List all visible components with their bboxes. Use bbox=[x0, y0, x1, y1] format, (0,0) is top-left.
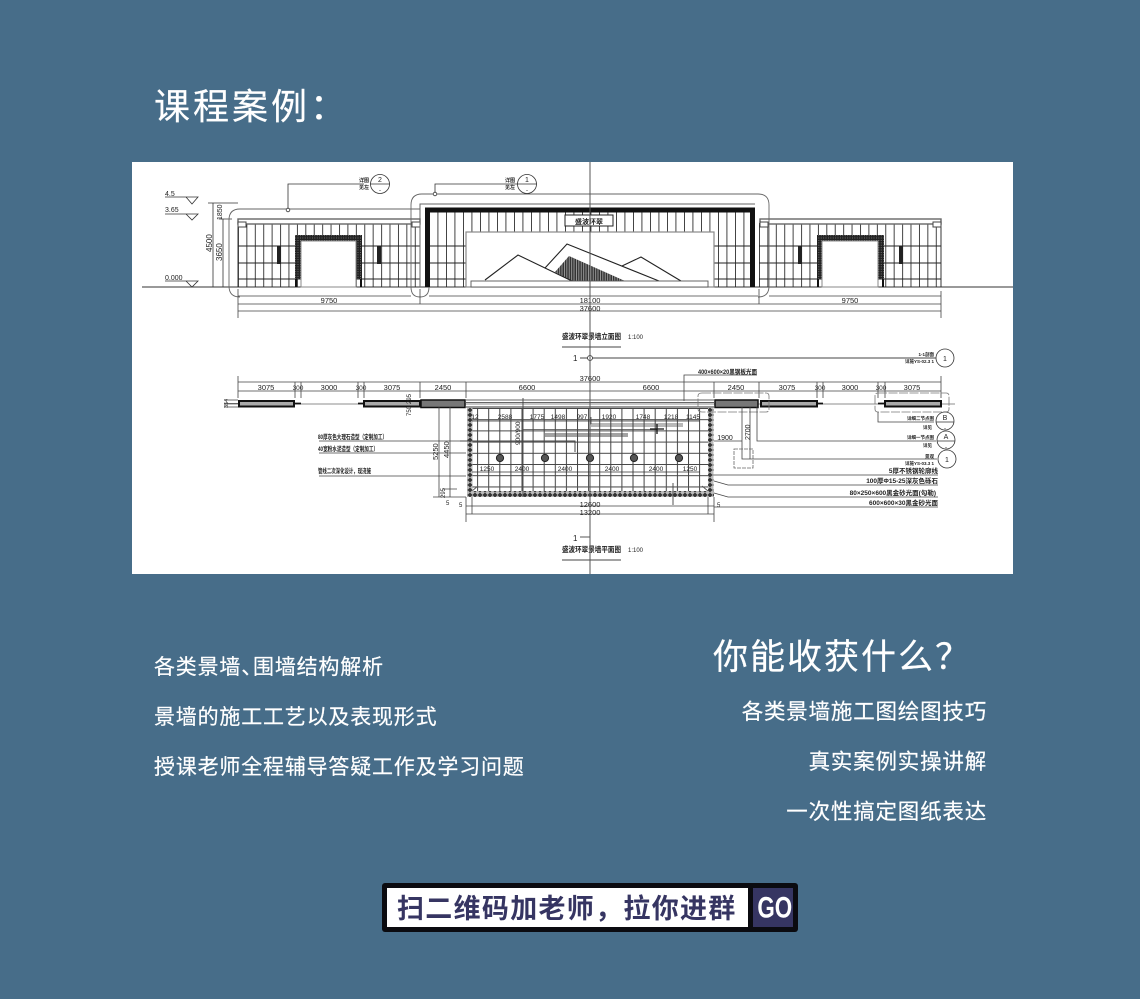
plan inner dimensions: 1498 bbox=[551, 414, 566, 421]
plan left notes: 管线二次深化设计，现浇施 bbox=[318, 466, 371, 475]
section line with marker: 1-1剖面 bbox=[918, 351, 934, 358]
plan inner dimensions: 1920 bbox=[602, 414, 617, 421]
text block: gains bbox=[742, 695, 987, 826]
plan inner dimensions: 2400 bbox=[605, 466, 620, 473]
plan right callouts: 1900 bbox=[717, 435, 733, 442]
plan left vertical dimensions: 750 bbox=[407, 405, 413, 416]
plan left vertical dimensions: 5250 bbox=[431, 443, 440, 460]
callout 2 bbox=[286, 174, 390, 212]
plan bottom dimensions: 12600 bbox=[580, 500, 600, 509]
plan right material notes: 5厚不锈钢轮廓线 bbox=[889, 466, 938, 475]
plan wall segments: 354 bbox=[224, 399, 230, 408]
plan right callouts: 详细一节点图 bbox=[907, 434, 934, 441]
plan top dimensions: 300 bbox=[815, 385, 826, 392]
plan top dimensions: 300 bbox=[876, 385, 887, 392]
plan top dimensions: 300 bbox=[293, 385, 304, 392]
callout 1 bbox=[433, 174, 537, 196]
ground line bbox=[142, 286, 1013, 288]
plan right callouts: B bbox=[943, 415, 948, 422]
plan right callouts: - bbox=[944, 426, 946, 432]
section line with marker bbox=[573, 349, 954, 367]
plan inner dimensions: 1775 bbox=[530, 414, 545, 421]
plan top dimensions: 2450 bbox=[728, 383, 744, 392]
text block: course contents: 各类景墙、围墙结构解析 bbox=[154, 651, 384, 681]
plan inner dimensions: 1250 bbox=[683, 466, 698, 473]
text block: gains: 各类景墙施工图绘图技巧 bbox=[742, 695, 987, 726]
plan left vertical dimensions: 4450 bbox=[442, 441, 451, 458]
elevation dimensions: 9750 bbox=[321, 296, 337, 305]
plan paved area: 900/900 bbox=[515, 421, 522, 445]
callout 2: 详图 bbox=[359, 177, 369, 184]
callout 2: - bbox=[379, 188, 381, 194]
button GO label: GO bbox=[757, 891, 792, 924]
elevation caption: 1:100 bbox=[628, 335, 644, 341]
text block: gains: 一次性搞定图纸表达 bbox=[786, 795, 987, 826]
elevation dimensions: 37600 bbox=[580, 304, 600, 313]
plan bottom dimensions bbox=[466, 497, 721, 522]
plan right material notes bbox=[714, 466, 938, 507]
plan dashed detail outlines bbox=[698, 393, 949, 412]
plan inner dimensions: 2400 bbox=[558, 466, 573, 473]
plan drawing bbox=[224, 367, 956, 560]
plan caption bbox=[562, 534, 644, 560]
elevation dimensions: 9750 bbox=[842, 296, 858, 305]
plan right callouts: 2700 bbox=[745, 424, 752, 440]
callout 2: 见左 bbox=[359, 184, 369, 191]
title: course case: 课程案例： bbox=[154, 78, 349, 130]
plan left notes: 80厚灰色大理石造型（定制加工） bbox=[318, 432, 387, 441]
elevation dimensions: 18100 bbox=[580, 296, 600, 305]
level markers bbox=[165, 197, 238, 287]
plan caption: 1 bbox=[573, 534, 578, 543]
plan right material notes: 100厚Φ15-25深灰色砾石 bbox=[866, 476, 938, 485]
plan inner dimensions: 1250 bbox=[480, 466, 495, 473]
plan left notes: 40宽粉水泥造型（定制加工） bbox=[318, 444, 378, 453]
callout 2: 2 bbox=[378, 177, 382, 184]
top material note bbox=[684, 367, 757, 401]
plan top dimensions: 6600 bbox=[643, 383, 659, 392]
plan right callouts: - bbox=[945, 445, 947, 451]
plan right material notes: 600×600×30黑金砂光面 bbox=[869, 498, 938, 507]
plan caption: 盛波环翠景墙平面图 bbox=[562, 544, 621, 554]
plan inner dimensions: 2400 bbox=[515, 466, 530, 473]
button text field: 扫二维码加老师，拉你进群 bbox=[397, 894, 737, 924]
plan inner dimensions: 12 bbox=[471, 414, 479, 421]
section line with marker: 详施YS-02.3 1 bbox=[905, 358, 934, 365]
plan right callouts: 详施YS-03.3 1 bbox=[905, 460, 934, 467]
plan inner dimensions: 1748 bbox=[636, 414, 651, 421]
text block: course contents: 授课老师全程辅导答疑工作及学习问题 bbox=[154, 751, 525, 781]
plan top dimensions: 300 bbox=[356, 385, 367, 392]
elevation drawing: 3.65 bbox=[165, 207, 179, 214]
plan bottom dimensions: 5 bbox=[717, 503, 721, 509]
elevation caption bbox=[562, 331, 644, 347]
plan right callouts: 景观 bbox=[925, 453, 934, 460]
plan left vertical dimensions: 5 bbox=[446, 501, 450, 507]
top material note: 400×600×20黑钢板光面 bbox=[698, 367, 757, 376]
plan top dimensions bbox=[238, 374, 941, 398]
heading: what you gain: 你能收获什么？ bbox=[713, 629, 972, 680]
plan left vertical dimensions: 295 bbox=[441, 487, 447, 498]
left wing wall bbox=[238, 219, 420, 287]
plan right callouts: 详细二节点图 bbox=[907, 415, 934, 422]
elevation drawing: 1850 bbox=[217, 204, 224, 220]
elevation drawing: 4.5 bbox=[165, 191, 175, 198]
plan top dimensions: 3075 bbox=[384, 383, 400, 392]
text block: course contents: 景墙的施工工艺以及表现形式 bbox=[154, 701, 437, 731]
elevation caption: 盛波环翠景墙立面图 bbox=[562, 331, 621, 341]
plan top dimensions: 3000 bbox=[321, 383, 337, 392]
elevation dimensions bbox=[238, 289, 941, 318]
call to action button bbox=[382, 883, 798, 932]
text block: gains: 真实案例实操讲解 bbox=[809, 745, 987, 776]
callout 1: 详图 bbox=[505, 177, 515, 184]
panel: CAD drawing bbox=[132, 162, 1013, 574]
plan left vertical dimensions: 295 bbox=[407, 393, 413, 404]
plan wall segments bbox=[224, 399, 955, 408]
elevation drawing: 0.000 bbox=[165, 275, 183, 282]
sign plate: 盛波环翠 bbox=[575, 217, 603, 226]
plan top dimensions: 6600 bbox=[519, 383, 535, 392]
plan right callouts: 详见 bbox=[923, 442, 932, 449]
plan right callouts bbox=[714, 407, 956, 468]
right wing wall bbox=[759, 219, 941, 287]
plan inner dimensions: 2588 bbox=[498, 414, 513, 421]
plan inner dimensions: 997 bbox=[577, 414, 588, 421]
plan right callouts: 1 bbox=[945, 457, 949, 464]
text block: course contents bbox=[154, 651, 525, 781]
plan top dimensions: 3075 bbox=[904, 383, 920, 392]
dashed outline clouds bbox=[229, 194, 769, 297]
plan caption: 1:100 bbox=[628, 548, 644, 554]
callout 1: - bbox=[526, 188, 528, 194]
plan left notes bbox=[318, 432, 466, 476]
plan lights bbox=[496, 454, 683, 462]
plan right material notes: 80×250×600黑金砂光面(勾勒) bbox=[850, 488, 936, 497]
plan top dimensions: 3075 bbox=[779, 383, 795, 392]
section line with marker: 1 bbox=[573, 354, 578, 363]
plan top dimensions: 3000 bbox=[842, 383, 858, 392]
mountain relief bbox=[471, 244, 708, 287]
callout 1: 见左 bbox=[505, 184, 515, 191]
plan top dimensions: 37600 bbox=[580, 374, 600, 383]
plan right callouts: 详见 bbox=[923, 424, 932, 431]
plan bottom dimensions: 13200 bbox=[580, 508, 600, 517]
plan left vertical dimensions bbox=[407, 393, 466, 509]
center wall bbox=[420, 204, 755, 287]
section line with marker: 1 bbox=[943, 356, 947, 363]
plan right callouts: A bbox=[944, 434, 949, 441]
plan left vertical dimensions: 5 bbox=[459, 503, 463, 509]
sign plate bbox=[565, 215, 613, 226]
plan paved area bbox=[460, 398, 714, 505]
plan inner dimensions: 1145 bbox=[686, 414, 700, 421]
plan inner dimensions: 1218 bbox=[664, 414, 679, 421]
elevation drawing: 4500 bbox=[205, 234, 214, 252]
center axis line bbox=[589, 162, 591, 574]
elevation drawing: 3650 bbox=[215, 243, 224, 261]
plan inner dimensions: 2400 bbox=[649, 466, 664, 473]
plan inner dimensions bbox=[471, 414, 700, 473]
elevation drawing bbox=[142, 174, 1013, 347]
plan top dimensions: 2450 bbox=[435, 383, 451, 392]
plan top dimensions: 3075 bbox=[258, 383, 274, 392]
callout 1: 1 bbox=[525, 177, 529, 184]
